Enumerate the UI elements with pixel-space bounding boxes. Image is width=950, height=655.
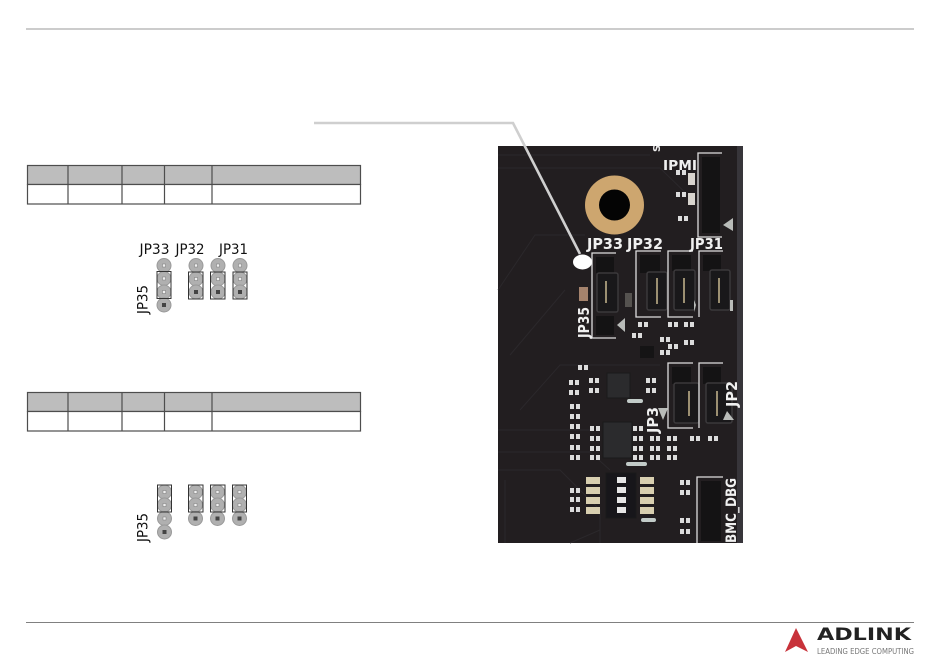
jumper diagram 1 xyxy=(136,242,248,315)
jumper diagram 2 xyxy=(136,485,246,543)
jumper labels 1: JP35 xyxy=(136,285,152,315)
top rule xyxy=(26,28,914,30)
silkscreen labels xyxy=(575,145,741,543)
jumper labels 1: JP33 xyxy=(139,242,170,258)
jumper labels 1 xyxy=(136,242,248,315)
pin header group 2 xyxy=(158,485,246,539)
silkscreen labels: JP33 xyxy=(586,235,623,253)
board traces xyxy=(498,155,698,543)
logo wordmark: ADLINK xyxy=(817,625,912,645)
silkscreen labels: JP2 xyxy=(723,381,741,408)
table 1 xyxy=(28,166,360,204)
silkscreen labels: JP31 xyxy=(689,235,723,253)
polarity triangles xyxy=(617,218,734,420)
pin header group 1 xyxy=(157,258,247,312)
small components xyxy=(569,170,718,534)
silkscreen labels: BMC_DBG xyxy=(724,478,740,543)
silkscreen labels: S xyxy=(652,145,663,152)
silkscreen labels: JP3 xyxy=(644,407,662,434)
table 2 xyxy=(28,392,360,431)
bottom rule xyxy=(26,622,914,623)
jumper caps xyxy=(597,270,732,423)
ICs xyxy=(603,373,636,518)
ADLINK logo xyxy=(785,625,914,655)
silkscreen labels: JP35 xyxy=(575,307,593,339)
jumper labels 1: JP31 xyxy=(218,242,248,258)
jumper label JP35: JP35 xyxy=(136,513,152,543)
silkscreen connector outlines xyxy=(592,153,723,543)
board background xyxy=(498,146,743,543)
logo triangle xyxy=(785,628,808,652)
board photo xyxy=(498,145,743,543)
callout leader line xyxy=(314,123,592,270)
silkscreen labels: JP32 xyxy=(626,235,663,253)
silkscreen labels: IPMI xyxy=(663,158,697,174)
mounting hole xyxy=(585,176,644,234)
jumper labels 1: JP32 xyxy=(175,242,204,258)
connector headers xyxy=(596,157,721,541)
